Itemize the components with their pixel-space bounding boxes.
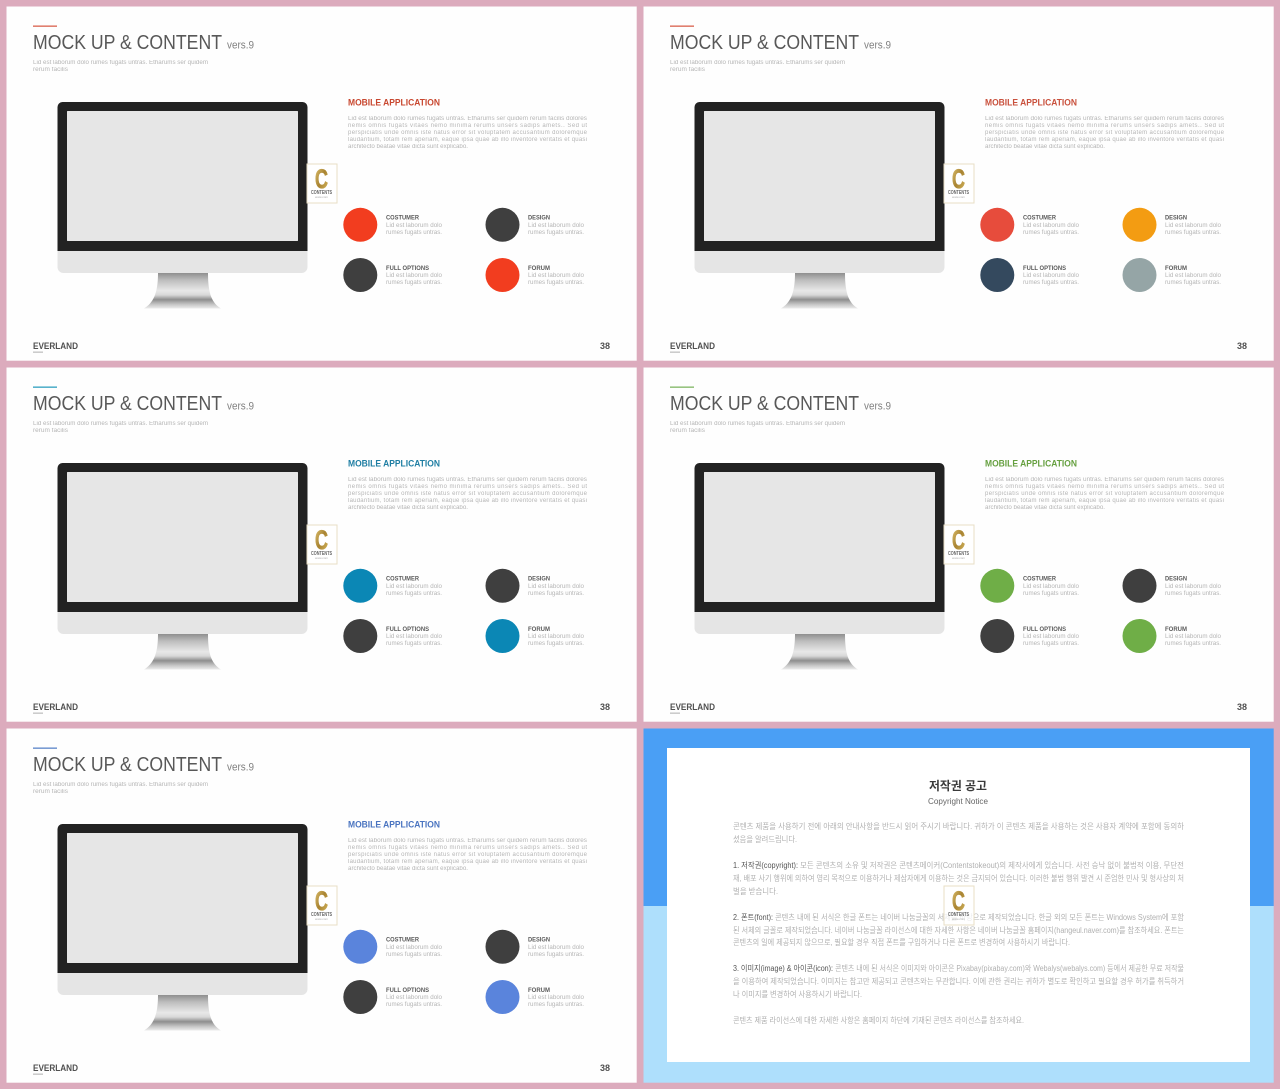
watermark logo: C — [315, 164, 328, 194]
feature items: COSTUMER — [386, 937, 419, 944]
feature items: FULL OPTIONS — [1023, 626, 1067, 633]
mobile application text: architecto beatae vitae dicta sunt explicabo. — [348, 144, 468, 150]
footer: EVERLAND — [33, 341, 78, 351]
copyright section 2: 2. 폰트(font): — [733, 913, 773, 922]
footer: EVERLAND — [670, 702, 715, 712]
watermark logo — [307, 886, 337, 925]
mobile application text: MOBILE APPLICATION — [985, 458, 1077, 470]
title block: Lid est laborum dolo rumes fugats untras. Etharums ser quidem — [670, 60, 845, 66]
watermark logo: www.com — [315, 196, 328, 199]
title block: vers.9 — [864, 400, 891, 412]
feature items: rumes fugats untras. — [1023, 640, 1079, 647]
watermark logo on notice: www.com — [952, 918, 965, 921]
mobile application text: perspiciatis unde omnis iste natus error sit voluptatem accusantium doloremque — [348, 852, 588, 858]
feature items: rumes fugats untras. — [386, 951, 442, 958]
mobile application text: nemis omnis fugats vitaes nemo minima rerums unsers sadips amets.. Sed ut — [348, 123, 587, 129]
mobile application text: architecto beatae vitae dicta sunt explicabo. — [348, 866, 468, 872]
mobile application text: nemis omnis fugats vitaes nemo minima rerums unsers sadips amets.. Sed ut — [985, 123, 1224, 129]
title block: vers.9 — [864, 40, 891, 52]
monitor mockup — [58, 824, 308, 1030]
title block: Lid est laborum dolo rumes fugats untras. Etharums ser quidem — [670, 421, 845, 427]
watermark logo on notice: CONTENTS — [948, 912, 970, 918]
watermark logo: CONTENTS — [311, 551, 333, 557]
feature items — [343, 930, 584, 1014]
mobile application text: laudantium, totam rem aperiam, eaque ipsa quae ab illo inventore veritatis et quasi — [985, 137, 1224, 143]
mobile application text: perspiciatis unde omnis iste natus error sit voluptatem accusantium doloremque — [985, 491, 1225, 497]
mobile application text: MOBILE APPLICATION — [348, 98, 440, 108]
mobile application text: nemis omnis fugats vitaes nemo minima rerums unsers sadips amets.. Sed ut — [985, 484, 1224, 490]
watermark logo: CONTENTS — [311, 190, 333, 196]
watermark logo: C — [315, 525, 328, 555]
title block: vers.9 — [227, 400, 254, 412]
feature items: FORUM — [528, 987, 550, 994]
watermark logo: CONTENTS — [311, 912, 333, 918]
slide 1: red mock up — [6, 6, 637, 361]
mobile application text: perspiciatis unde omnis iste natus error sit voluptatem accusantium doloremque — [348, 130, 588, 136]
watermark logo: C — [952, 164, 965, 194]
slide 2: multicolour mock up — [644, 6, 1274, 361]
slide 4: green mock up — [644, 368, 1274, 722]
copyright section 3 — [733, 963, 1184, 999]
title block: Lid est laborum dolo rumes fugats untras. Etharums ser quidem — [33, 60, 208, 66]
feature items: rumes fugats untras. — [1165, 229, 1221, 236]
mobile application text: nemis omnis fugats vitaes nemo minima rerums unsers sadips amets.. Sed ut — [348, 845, 587, 851]
watermark logo: C — [952, 525, 965, 555]
footer — [33, 1063, 610, 1074]
feature items: COSTUMER — [386, 215, 419, 222]
feature items: Lid est laborum dolo — [386, 583, 442, 590]
feature items: rumes fugats untras. — [386, 279, 442, 286]
copyright intro: 콘텐츠 제품을 사용하기 전에 아래의 안내사항을 반드시 읽어 주시기 바랍니다. 귀하가 이 콘텐츠 제품을 사용하는 것은 사용자 계약에 포함에 동의하 — [733, 821, 1185, 831]
footer — [670, 341, 1247, 352]
copyright section 3: 을 이용하여 제작되었습니다. 이미지는 참고만 제공되고 콘텐츠와는 무관합니다. 이에 관한 권리는 귀하가 별도로 확인하고 필요할 경우 허가를 취득하거 — [733, 976, 1184, 986]
mobile application text: laudantium, totam rem aperiam, eaque ipsa quae ab illo inventore veritatis et quasi — [348, 137, 587, 143]
mobile application text — [348, 458, 588, 511]
feature items: rumes fugats untras. — [386, 1001, 442, 1008]
feature items: rumes fugats untras. — [528, 951, 584, 958]
mobile application text: Lid est laborum dolo rumes fugats untras. Etharums ser quidem rerum facilis dolores — [348, 838, 587, 844]
footer: 38 — [1237, 341, 1247, 351]
footer: 38 — [600, 702, 610, 712]
copyright section 1: 모든 콘텐츠의 소유 및 저작권은 콘텐츠메이커(Contentstokeout)의 제작사에게 있습니다. 사전 승낙 없이 불법적 이용, 무단전 — [800, 860, 1184, 870]
copyright section 1: 1. 저작권(copyright): — [733, 860, 798, 870]
mobile application text: perspiciatis unde omnis iste natus error sit voluptatem accusantium doloremque — [985, 130, 1225, 136]
feature items: Lid est laborum dolo — [528, 994, 584, 1001]
title block: Lid est laborum dolo rumes fugats untras. Etharums ser quidem — [33, 782, 208, 788]
feature items: rumes fugats untras. — [386, 590, 442, 597]
feature items: rumes fugats untras. — [528, 279, 584, 286]
title block — [33, 386, 254, 434]
watermark logo: www.com — [952, 557, 965, 560]
watermark logo: www.com — [315, 557, 328, 560]
footer: EVERLAND — [33, 1063, 78, 1073]
feature items: rumes fugats untras. — [1165, 590, 1221, 597]
feature items: Lid est laborum dolo — [1165, 272, 1221, 279]
feature items: Lid est laborum dolo — [528, 944, 584, 951]
mobile application text: nemis omnis fugats vitaes nemo minima rerums unsers sadips amets.. Sed ut — [348, 484, 587, 490]
feature items: Lid est laborum dolo — [386, 272, 442, 279]
title block: MOCK UP & CONTENT — [670, 32, 859, 54]
copyright section 2 — [733, 912, 1185, 947]
feature items: Lid est laborum dolo — [386, 944, 442, 951]
feature items: Lid est laborum dolo — [1165, 583, 1221, 590]
watermark logo: C — [315, 886, 328, 916]
copyright heading — [928, 778, 989, 806]
title block: rerum facilis — [33, 67, 68, 73]
feature items: FORUM — [528, 265, 550, 272]
feature items: rumes fugats untras. — [1023, 279, 1079, 286]
feature items: Lid est laborum dolo — [386, 222, 442, 229]
watermark logo — [944, 164, 974, 203]
footer: EVERLAND — [33, 702, 78, 712]
mobile application text: MOBILE APPLICATION — [348, 458, 440, 470]
copyright heading: 저작권 공고 — [929, 778, 987, 793]
footer: 38 — [600, 341, 610, 351]
title block — [670, 386, 891, 434]
mobile application text: Lid est laborum dolo rumes fugats untras. Etharums ser quidem rerum facilis dolores — [348, 116, 587, 122]
mobile application text: laudantium, totam rem aperiam, eaque ipsa quae ab illo inventore veritatis et quasi — [348, 498, 587, 504]
copyright section 2: 콘텐츠의 일에 제공되지 않으므로, 필요할 경우 직접 폰트를 구입하거나 다른 폰트로 변경하여 사용하시기 바랍니다. — [733, 937, 1070, 947]
copyright section 1: 재, 배포 사기 행위에 의하여 영리 목적으로 이용하거나 제삼자에게 이용하는 것은 금지되어 있습니다. 이러한 불법 행위 발견 시 준엄한 민사 및 형사상의 처 — [733, 873, 1184, 883]
title block: vers.9 — [227, 40, 254, 52]
feature items: COSTUMER — [386, 576, 419, 583]
feature items: COSTUMER — [1023, 576, 1056, 583]
slide 3: teal mock up — [6, 368, 637, 722]
copyright closing: 콘텐츠 제품 라이선스에 대한 자세한 사항은 홈페이지 하단에 기재된 콘텐츠 라이선스를 참조하세요. — [733, 1015, 1024, 1025]
copyright heading: Copyright Notice — [928, 797, 989, 806]
mobile application text: architecto beatae vitae dicta sunt explicabo. — [985, 505, 1105, 511]
title block: MOCK UP & CONTENT — [670, 393, 859, 415]
copyright section 3: 3. 이미지(image) & 아이콘(icon): — [733, 963, 833, 973]
feature items — [343, 208, 584, 292]
title block: Lid est laborum dolo rumes fugats untras. Etharums ser quidem — [33, 421, 208, 427]
feature items: Lid est laborum dolo — [1023, 272, 1079, 279]
watermark logo on notice: C — [952, 886, 965, 916]
feature items: rumes fugats untras. — [528, 640, 584, 647]
feature items: Lid est laborum dolo — [1023, 222, 1079, 229]
feature items: FULL OPTIONS — [386, 626, 430, 633]
feature items: Lid est laborum dolo — [528, 633, 584, 640]
feature items: FULL OPTIONS — [386, 265, 430, 272]
footer: 38 — [600, 1063, 610, 1073]
watermark logo — [307, 164, 337, 203]
feature items: rumes fugats untras. — [1165, 279, 1221, 286]
mobile application text: MOBILE APPLICATION — [348, 820, 440, 830]
feature items: Lid est laborum dolo — [528, 222, 584, 229]
watermark logo: CONTENTS — [948, 190, 970, 196]
feature items: FULL OPTIONS — [386, 987, 430, 994]
title block: rerum facilis — [670, 67, 705, 73]
title block: MOCK UP & CONTENT — [33, 393, 222, 415]
title block: rerum facilis — [670, 428, 705, 434]
feature items: rumes fugats untras. — [1023, 229, 1079, 236]
feature items: DESIGN — [528, 576, 550, 583]
copyright section 2: 콘텐츠 내에 된 서식은 한글 폰트는 네이버 나눔글꼴의 서체를 바탕으로 제작되었습니다. 한글 외의 모든 폰트는 Windows System에 포함 — [775, 912, 1185, 922]
mobile application text: MOBILE APPLICATION — [985, 98, 1077, 108]
feature items: FORUM — [1165, 626, 1187, 633]
mobile application text — [348, 820, 588, 872]
watermark logo — [944, 525, 974, 564]
feature items: rumes fugats untras. — [528, 229, 584, 236]
feature items: Lid est laborum dolo — [1165, 633, 1221, 640]
feature items: DESIGN — [1165, 576, 1187, 583]
mobile application text: Lid est laborum dolo rumes fugats untras. Etharums ser quidem rerum facilis dolores — [985, 477, 1224, 483]
watermark logo — [307, 525, 337, 564]
feature items: FORUM — [1165, 265, 1187, 272]
mobile application text — [348, 98, 588, 150]
slide 5: blue mock up — [6, 728, 637, 1083]
footer: EVERLAND — [670, 341, 715, 351]
mobile application text: architecto beatae vitae dicta sunt explicabo. — [348, 505, 468, 511]
monitor mockup — [694, 102, 944, 308]
footer — [670, 702, 1247, 714]
mobile application text: Lid est laborum dolo rumes fugats untras. Etharums ser quidem rerum facilis dolores — [985, 116, 1224, 122]
copyright intro: 셨음을 알려드립니다. — [733, 834, 797, 844]
copyright section 1: 벌을 받습니다. — [733, 886, 778, 896]
feature items: Lid est laborum dolo — [528, 583, 584, 590]
title block: vers.9 — [227, 762, 254, 774]
mobile application text: perspiciatis unde omnis iste natus error sit voluptatem accusantium doloremque — [348, 491, 588, 497]
feature items: Lid est laborum dolo — [1165, 222, 1221, 229]
footer — [33, 702, 610, 714]
feature items: Lid est laborum dolo — [386, 994, 442, 1001]
copyright intro — [733, 821, 1185, 844]
monitor mockup — [694, 463, 944, 670]
watermark logo: www.com — [315, 918, 328, 921]
footer — [33, 341, 610, 352]
feature items: rumes fugats untras. — [386, 229, 442, 236]
feature items: FULL OPTIONS — [1023, 265, 1067, 272]
feature items: DESIGN — [528, 937, 550, 944]
feature items: COSTUMER — [1023, 215, 1056, 222]
feature items: Lid est laborum dolo — [1023, 633, 1079, 640]
feature items — [980, 208, 1221, 292]
mobile application text: laudantium, totam rem aperiam, eaque ipsa quae ab illo inventore veritatis et quasi — [985, 498, 1224, 504]
mobile application text: laudantium, totam rem aperiam, eaque ipsa quae ab illo inventore veritatis et quasi — [348, 859, 587, 865]
title block: rerum facilis — [33, 428, 68, 434]
title block — [670, 26, 891, 73]
feature items: FORUM — [528, 626, 550, 633]
copyright section 3: 콘텐츠 내에 된 서식은 이미지와 아이콘은 Pixabay(pixabay.com)와 Webalys(webalys.com) 등에서 제공한 무료 저작물 — [835, 963, 1184, 973]
title block: MOCK UP & CONTENT — [33, 32, 222, 54]
feature items: Lid est laborum dolo — [1023, 583, 1079, 590]
feature items: rumes fugats untras. — [528, 1001, 584, 1008]
copyright section 2: 된 서체의 글꼴로 제작되었습니다. 네이버 나눔글꼴 라이선스에 대한 자세한 사항은 네이버 나눔글꼴 홈페이지(hangeul.naver.com)를 참조하세요. 폰트는 — [733, 925, 1184, 935]
panel: copyright notice — [644, 728, 1274, 1083]
feature items — [980, 569, 1221, 653]
watermark logo on notice — [944, 886, 974, 925]
copyright section 3: 나 이미지를 변경하여 사용하시기 바랍니다. — [733, 989, 862, 999]
mobile application text: architecto beatae vitae dicta sunt explicabo. — [985, 144, 1105, 150]
feature items: rumes fugats untras. — [528, 590, 584, 597]
feature items: DESIGN — [528, 215, 550, 222]
title block — [33, 26, 254, 73]
watermark logo: CONTENTS — [948, 551, 970, 557]
footer: 38 — [1237, 702, 1247, 712]
feature items: rumes fugats untras. — [1023, 590, 1079, 597]
monitor mockup — [58, 463, 308, 670]
title block: rerum facilis — [33, 789, 68, 795]
mobile application text: Lid est laborum dolo rumes fugats untras. Etharums ser quidem rerum facilis dolores — [348, 477, 587, 483]
mobile application text — [985, 98, 1225, 150]
copyright section 1 — [733, 860, 1184, 896]
mobile application text — [985, 458, 1225, 511]
feature items: rumes fugats untras. — [386, 640, 442, 647]
feature items — [343, 569, 584, 653]
watermark logo: www.com — [952, 196, 965, 199]
feature items: Lid est laborum dolo — [386, 633, 442, 640]
feature items: Lid est laborum dolo — [528, 272, 584, 279]
feature items: DESIGN — [1165, 215, 1187, 222]
title block — [33, 748, 254, 795]
feature items: rumes fugats untras. — [1165, 640, 1221, 647]
title block: MOCK UP & CONTENT — [33, 754, 222, 776]
monitor mockup — [58, 102, 308, 308]
